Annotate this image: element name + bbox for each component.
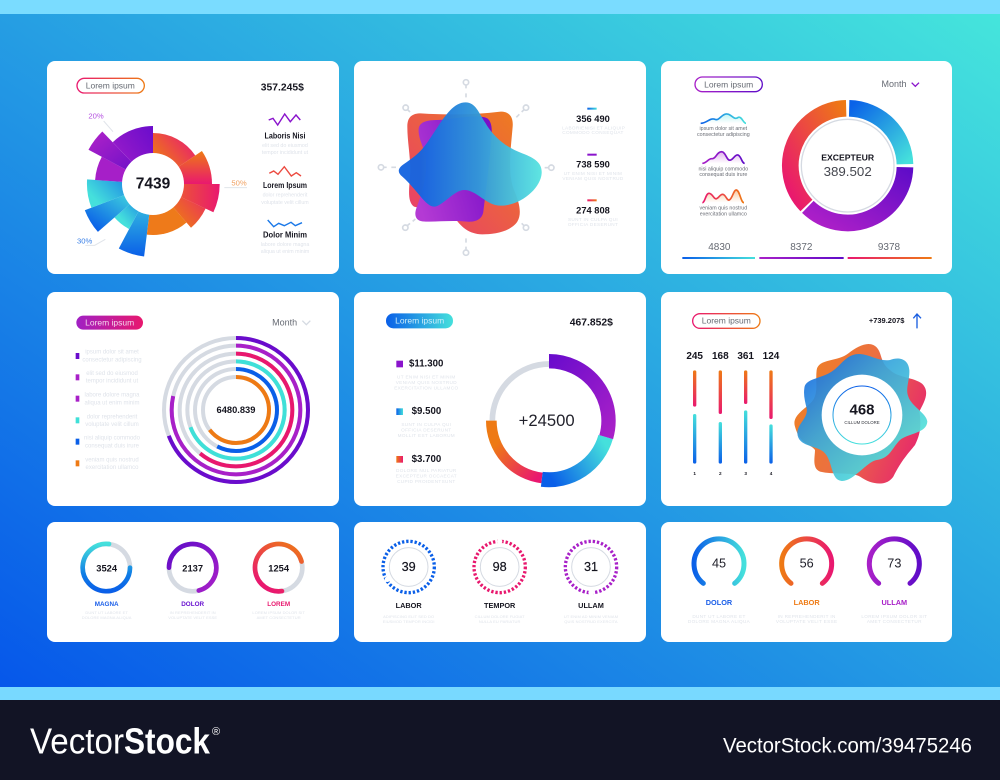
stat text: ullam: UT ENIM AD MINIM VENIAM xyxy=(564,614,618,619)
label: 50 percent: 50% xyxy=(231,178,247,187)
panel: three gauges xyxy=(661,522,952,642)
gauge text: dolor: 45 xyxy=(712,556,726,570)
panel: radial sector chart xyxy=(47,61,339,274)
sparkline: purple xyxy=(702,152,745,163)
legend list xyxy=(76,350,142,471)
bar column 3 xyxy=(737,351,754,476)
ring: magna xyxy=(83,544,130,591)
sparkline: blue xyxy=(701,114,746,123)
bar column 2: 168 xyxy=(712,351,729,362)
stat: 738 590 xyxy=(562,154,624,181)
stat: 3.700: CUPID PROIDENTSUNT xyxy=(397,479,456,484)
legend list: consequat duis irure xyxy=(85,443,140,449)
squiggle: purple xyxy=(269,114,300,125)
legend list: voluptate velit cillum xyxy=(85,422,139,428)
panel: excepteur donut xyxy=(661,61,952,274)
legend: laboris nisi: tempor incididunt ut xyxy=(262,150,309,156)
legend: lorem ipsum: dolor reprehenderit xyxy=(263,192,308,198)
legend: lorem ipsum: Lorem Ipsum xyxy=(263,181,307,190)
stat text: tempor: NULLA EU PARIATUR xyxy=(479,619,520,624)
caption: sparkline red: exercitation ullamco xyxy=(700,211,747,217)
donut center text: EXCEPTEUR xyxy=(821,153,875,163)
donut chart xyxy=(790,108,905,223)
stat text: dolor: 2137 xyxy=(182,563,203,573)
bar column 3: 361 xyxy=(737,351,754,362)
month selector xyxy=(272,317,310,327)
stat text: dolor: VOLUPTATE VELIT ESSE xyxy=(168,615,217,620)
label: 20 percent xyxy=(88,111,113,132)
stat: 738 590: 738 590 xyxy=(576,160,610,170)
legend list: tempor incididunt ut xyxy=(86,379,138,385)
bar column 4: 124 xyxy=(763,351,780,362)
stat: 356 490: COMMODO CONSEQUAT xyxy=(562,130,624,135)
footer url: VectorStock.com/39475246 xyxy=(723,734,972,758)
legend list: elit sed do eiusmod xyxy=(86,371,138,377)
pill: filled blue xyxy=(386,313,453,328)
gauge text: ullam xyxy=(861,556,927,624)
label: 30 percent xyxy=(77,236,105,245)
stat text: magna xyxy=(82,563,132,620)
stat text: lorem xyxy=(252,563,305,620)
stat text: lorem: 1254 xyxy=(268,563,290,573)
stat: 274 808: OFFICIA DESERUNT xyxy=(568,222,618,227)
stat text: ullam: QUIS NOSTRUD EXERCITA xyxy=(564,619,618,624)
stat: 356 490: LABORIENISI ET ALIQUIP xyxy=(562,125,625,130)
stat: 3.700: $3.700 xyxy=(412,454,441,465)
panel: three progress rings xyxy=(47,522,339,642)
pill: filled blue: Lorem ipsum xyxy=(395,316,444,326)
legend: laboris nisi xyxy=(262,132,309,156)
stat text: dolor: DOLOR xyxy=(181,601,205,608)
gauge text: dolor: DUNT UT LABORE ET xyxy=(692,614,746,619)
total value: 467.852$ xyxy=(570,317,613,328)
stat: 11.300: VENIAM QUIS NOSTRUD xyxy=(396,380,457,385)
pill: lorem ipsum: Lorem ipsum xyxy=(86,81,135,91)
gauge: ullam xyxy=(869,539,919,583)
pill: lorem ipsum: Lorem ipsum xyxy=(704,79,753,89)
gauge text: labor: VOLUPTATE VELIT ESSE xyxy=(776,619,837,624)
legend: laboris nisi: elit sed do eiusmod xyxy=(262,143,308,149)
legend list: exercitation ullamco xyxy=(86,465,139,471)
stat text: lorem: AMET CONSECTETUR xyxy=(257,615,301,620)
sparkline: red xyxy=(702,190,744,203)
stat text: tempor xyxy=(475,560,525,624)
stat: 4830 xyxy=(682,242,755,259)
footer bar xyxy=(0,700,1000,780)
stat: 9378: 9378 xyxy=(878,242,901,253)
caption: sparkline blue: ipsum dolor sit amet xyxy=(699,126,748,132)
label: 30 percent: 30% xyxy=(77,236,93,245)
gauge text: dolor: DOLOR xyxy=(706,598,733,607)
blob: purple xyxy=(415,116,492,222)
panel: bars and flower blob xyxy=(661,292,952,506)
gauge text: labor xyxy=(776,556,837,624)
gauge text: ullam: LOREM IPSUM DOLOR SIT xyxy=(861,614,927,619)
gauge: labor xyxy=(782,539,832,583)
stat: 9.500: $9.500 xyxy=(412,406,441,417)
stat text: magna: DOLORE MAGNA ALIQUA xyxy=(82,615,132,620)
gauge text: dolor xyxy=(688,556,751,624)
stat: 9.500: MOLLIT EST LABORUM xyxy=(398,433,455,438)
top light band xyxy=(0,0,1000,14)
legend: dolor minim xyxy=(261,230,310,255)
gauge: dolor xyxy=(694,539,744,583)
caption: sparkline blue xyxy=(697,126,750,138)
stat: 4830: 4830 xyxy=(708,242,731,253)
pill: filled magenta xyxy=(76,316,143,330)
stat: 274 808 xyxy=(568,199,618,227)
trend value: +739.207$ xyxy=(869,316,905,325)
stat text: dolor: IN REPREHENDERIT IN xyxy=(170,610,216,615)
dotted ring: labor xyxy=(383,541,434,593)
legend list: aliqua ut enim minim xyxy=(85,400,139,406)
legend: dolor minim: Dolor Minim xyxy=(263,230,307,240)
blob: orange red xyxy=(794,344,926,484)
flower center badge: 468 xyxy=(849,401,875,418)
caption: sparkline purple: nisi aliquip commodo xyxy=(698,166,748,172)
legend: laboris nisi: Laboris Nisi xyxy=(264,132,306,140)
bar column 1 xyxy=(686,351,703,476)
legend list: veniam quis nostrud xyxy=(85,457,139,463)
stat: 3.700: DOLORE NUL PARIATUR xyxy=(396,468,457,473)
gauge text: dolor: DOLORE MAGNA ALIQUA xyxy=(688,619,751,624)
bar column 4 xyxy=(763,351,780,476)
stat text: tempor: CILLUM DOLORE FUGIAT xyxy=(475,614,525,619)
node markers xyxy=(378,80,554,255)
stat: 356 490: 356 490 xyxy=(576,114,610,124)
donut value: +24500 xyxy=(519,411,575,430)
chart: radial sectors xyxy=(85,126,220,256)
stat text: magna: DUNT UT LABORE ET xyxy=(85,610,128,615)
ring: dolor xyxy=(169,544,216,591)
gauge text: labor: LABOR xyxy=(794,598,820,607)
pill: lorem ipsum xyxy=(695,77,762,92)
stat: 3.700: EXCEPTEUR OCCAECAT xyxy=(396,473,457,478)
stat: 11.300: UT ENIM NISI ET MINIM xyxy=(397,374,456,379)
stat text: magna: MAGNA xyxy=(95,601,119,608)
chart: radial sectors: 7439 xyxy=(136,176,171,192)
stat: 11.300: $11.300 xyxy=(409,358,443,369)
stat: 8372: 8372 xyxy=(790,242,813,253)
ring: lorem xyxy=(255,544,302,591)
legend list: dolor reprehenderit xyxy=(87,414,138,420)
month selector: Month xyxy=(272,317,297,327)
stat text: labor xyxy=(383,560,435,624)
stat: 9.500 xyxy=(396,406,455,438)
total value: 357.245$ xyxy=(261,82,304,93)
bar column 1: 1 xyxy=(693,471,696,476)
stat text: tempor: 98 xyxy=(493,560,507,574)
panel: overlapping blobs xyxy=(354,61,646,274)
stat: 274 808: 274 808 xyxy=(576,205,610,215)
blob: blue teal xyxy=(399,102,542,207)
pill: lorem ipsum: Lorem ipsum xyxy=(702,316,751,326)
stat text: ullam: ULLAM xyxy=(578,601,604,610)
flower center badge xyxy=(822,375,902,455)
dotted ring: tempor xyxy=(474,539,525,593)
panel: three dotted rings xyxy=(354,522,646,642)
stat: 11.300 xyxy=(394,358,458,390)
stat: 274 808: SUNT IN CULPA QUI xyxy=(568,217,618,222)
month selector xyxy=(882,79,919,89)
dotted ring: ullam xyxy=(565,541,617,595)
stat text: labor: LABOR xyxy=(396,601,422,610)
caption: sparkline blue: consectetur adipiscing xyxy=(697,132,750,138)
stat: 3.700 xyxy=(396,454,457,484)
legend: lorem ipsum xyxy=(261,181,309,206)
blob: blue teal xyxy=(797,354,927,481)
month selector: Month xyxy=(882,79,906,89)
pill: filled magenta: Lorem ipsum xyxy=(85,318,134,328)
stat text: lorem: LOREM xyxy=(267,601,290,608)
stat: 11.300: EXERCITATION ULLAMCO xyxy=(394,385,458,390)
legend: dolor minim: aliqua ut enim minim xyxy=(261,249,310,255)
footer logo: Stock xyxy=(124,720,211,762)
bar column 1: 245 xyxy=(686,351,703,362)
icon: up arrow xyxy=(913,314,921,328)
stat: 9.500: OFFICIA DESERUNT xyxy=(401,427,452,432)
stat text: ullam xyxy=(564,560,618,624)
stat text: labor: 39 xyxy=(402,560,416,574)
stat text: labor: EIUSMOD TEMPOR INCIDI xyxy=(383,619,435,624)
label: 50 percent xyxy=(224,178,247,188)
stat: 738 590: VENIAM QUIS NOSTRUD xyxy=(562,176,624,181)
ring chart value: 6480.839 xyxy=(217,405,255,415)
bar column 3: 3 xyxy=(744,471,747,476)
footer logo: Vector xyxy=(30,720,124,762)
caption: sparkline red: veniam quis nostrud xyxy=(699,205,747,211)
donut center text: 389.502 xyxy=(824,164,872,179)
concentric ring chart xyxy=(164,338,308,482)
legend list: ipsum dolor sit amet xyxy=(85,350,139,356)
pill: lorem ipsum xyxy=(77,78,144,93)
blob: red orange xyxy=(407,112,520,234)
legend list: labore dolore magna xyxy=(85,393,140,399)
gauge text: ullam: AMET CONSECTETUR xyxy=(867,619,922,624)
legend: lorem ipsum: voluptate velit cillum xyxy=(261,200,309,206)
label: 20 percent: 20% xyxy=(88,111,104,120)
footer logo xyxy=(30,720,220,762)
caption: sparkline purple: consequat duis irure xyxy=(699,172,747,178)
gauge text: labor: IN REPREHENDERIT IN xyxy=(778,614,836,619)
legend list: nisi aliquip commodo xyxy=(84,436,141,442)
stat text: ullam: 31 xyxy=(584,560,598,574)
footer logo: ® xyxy=(212,726,220,738)
legend list: consectetur adipiscing xyxy=(82,357,142,363)
bar column 2 xyxy=(712,351,729,476)
stat text: dolor xyxy=(168,563,217,620)
caption: sparkline red xyxy=(699,205,747,217)
stat text: magna: 3524 xyxy=(96,563,118,573)
stat: 356 490 xyxy=(562,108,625,135)
stat text: lorem: LOREM IPSUM DOLOR SIT xyxy=(252,610,305,615)
stat text: tempor: TEMPOR xyxy=(484,601,516,610)
squiggle: red xyxy=(269,167,301,176)
panel: concentric rings xyxy=(47,292,339,506)
stat: 9378 xyxy=(848,242,932,259)
legend: dolor minim: labore dolore magna xyxy=(261,242,309,248)
gauge text: ullam: ULLAM xyxy=(882,598,907,607)
squiggle: blue xyxy=(268,220,302,227)
caption: sparkline purple xyxy=(698,166,748,178)
stat text: labor: ADIPISCING ELIT SED DO xyxy=(383,614,434,619)
bar column 2: 2 xyxy=(719,471,722,476)
bottom light band xyxy=(0,687,1000,700)
bar column 4: 4 xyxy=(770,471,773,476)
gauge text: ullam: 73 xyxy=(887,556,901,570)
pill: lorem ipsum xyxy=(693,314,760,328)
stat: 9.500: SUNT IN CULPA QUI xyxy=(401,422,451,427)
stat: 738 590: UT ENIM NISI ET MINIM xyxy=(564,171,622,176)
panel: progress donut xyxy=(354,292,646,506)
donut center text xyxy=(821,153,875,179)
stat: 8372 xyxy=(759,242,844,259)
flower center badge: CILLUM DOLORE xyxy=(844,420,880,425)
gauge text: labor: 56 xyxy=(800,556,814,570)
donut segments xyxy=(491,361,609,480)
